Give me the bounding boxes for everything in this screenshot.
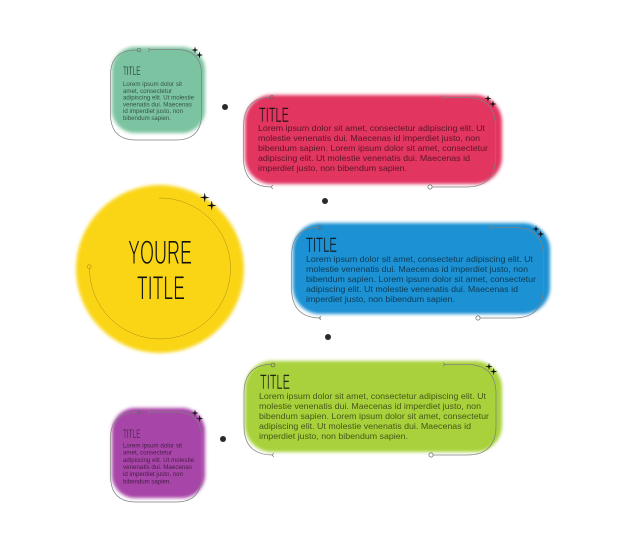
panel: teal card <box>110 46 205 140</box>
green card body text: molestie venenatis dui. Maecenas id imperdiet justo, non <box>259 401 481 411</box>
teal card title: TITLE <box>123 66 141 78</box>
main title: TITLE <box>137 270 185 308</box>
pink card body text: Lorem ipsum dolor sit amet, consectetur adipiscing elit. Ut <box>258 123 486 133</box>
green card fill <box>245 361 502 452</box>
connector dot 3 <box>325 334 331 340</box>
teal card body text: Lorem ipsum dolor sit <box>123 82 182 88</box>
pink card body text: bibendum sapien. Lorem ipsum dolor sit amet, consectetur <box>258 143 488 153</box>
green card body text: bibendum sapien. Lorem ipsum dolor sit amet, consectetur <box>259 411 489 421</box>
purple card title: TITLE <box>123 429 141 441</box>
connector dot 2 <box>322 198 328 204</box>
panel: green card <box>244 361 502 457</box>
icon: sparkles <box>484 95 497 108</box>
purple card body text <box>123 444 195 485</box>
teal card fill <box>112 47 205 133</box>
blue card title: TITLE <box>306 234 337 257</box>
pink card body text: molestie venenatis dui. Maecenas id imperdiet justo, non <box>258 133 480 143</box>
connector dot 1 <box>222 104 228 110</box>
blue card outline <box>292 226 544 320</box>
teal card outline <box>110 48 202 140</box>
panel: blue card <box>292 223 550 320</box>
icon: sparkles <box>200 192 217 210</box>
teal card body text: amet, consectetur <box>123 89 172 95</box>
green card body text: imperdiet justo, non bibendum sapien. <box>259 431 408 441</box>
purple card fill <box>112 408 205 498</box>
icon: sparkles <box>191 409 203 422</box>
green card title: TITLE <box>260 371 290 394</box>
teal card body text <box>123 82 195 122</box>
teal card body text: venenatis dui. Maecenas <box>123 102 192 108</box>
circle inner arc <box>87 198 230 339</box>
icon: sparkles <box>532 225 544 238</box>
pink card body text: imperdiet justo, non bibendum sapien. <box>258 163 407 173</box>
main title: YOURE <box>128 234 192 272</box>
green card outline <box>244 362 496 457</box>
pink card title: TITLE <box>259 104 289 127</box>
panel: pink card <box>244 95 502 189</box>
blue card body text: Lorem ipsum dolor sit amet, consectetur adipiscing elit. Ut <box>306 254 534 264</box>
yellow circle fill <box>76 185 244 353</box>
blue card body text: bibendum sapien. Lorem ipsum dolor sit amet, consectetur <box>306 274 536 284</box>
pink card fill <box>245 95 502 184</box>
purple card body text: venenatis dui. Maecenas <box>123 465 192 471</box>
icon: sparkles <box>191 46 203 59</box>
green card body text: Lorem ipsum dolor sit amet, consectetur adipiscing elit. Ut <box>259 391 487 401</box>
pink card outline <box>244 96 496 189</box>
teal card body text: bibendum sapien. <box>123 116 171 122</box>
teal card body text: adipiscing elit. Ut molestie <box>123 96 195 102</box>
purple card body text: bibendum sapien. <box>123 479 171 485</box>
purple card outline <box>110 410 202 502</box>
panel: central yellow circle <box>76 185 244 353</box>
purple card body text: amet, consectetur <box>123 451 172 457</box>
blue card body text: molestie venenatis dui. Maecenas id imperdiet justo, non <box>306 264 528 274</box>
pink card body text <box>258 123 488 173</box>
icon: sparkles <box>485 363 497 375</box>
pink card body text: adipiscing elit. Ut molestie venenatis dui. Maecenas id <box>258 153 470 163</box>
teal card body text: id imperdiet justo, non <box>123 109 183 115</box>
blue card body text <box>306 254 536 304</box>
main title <box>128 234 192 308</box>
green card body text: adipiscing elit. Ut molestie venenatis dui. Maecenas id <box>259 421 471 431</box>
blue card body text: imperdiet justo, non bibendum sapien. <box>306 294 455 304</box>
connector dot 4 <box>220 436 226 442</box>
purple card body text: Lorem ipsum dolor sit <box>123 444 182 450</box>
blue card body text: adipiscing elit. Ut molestie venenatis dui. Maecenas id <box>306 284 518 294</box>
green card body text <box>259 391 489 441</box>
purple card body text: id imperdiet justo, non <box>123 472 183 478</box>
panel: purple card <box>110 408 205 502</box>
blue card fill <box>293 223 550 314</box>
purple card body text: adipiscing elit. Ut molestie <box>123 458 195 464</box>
